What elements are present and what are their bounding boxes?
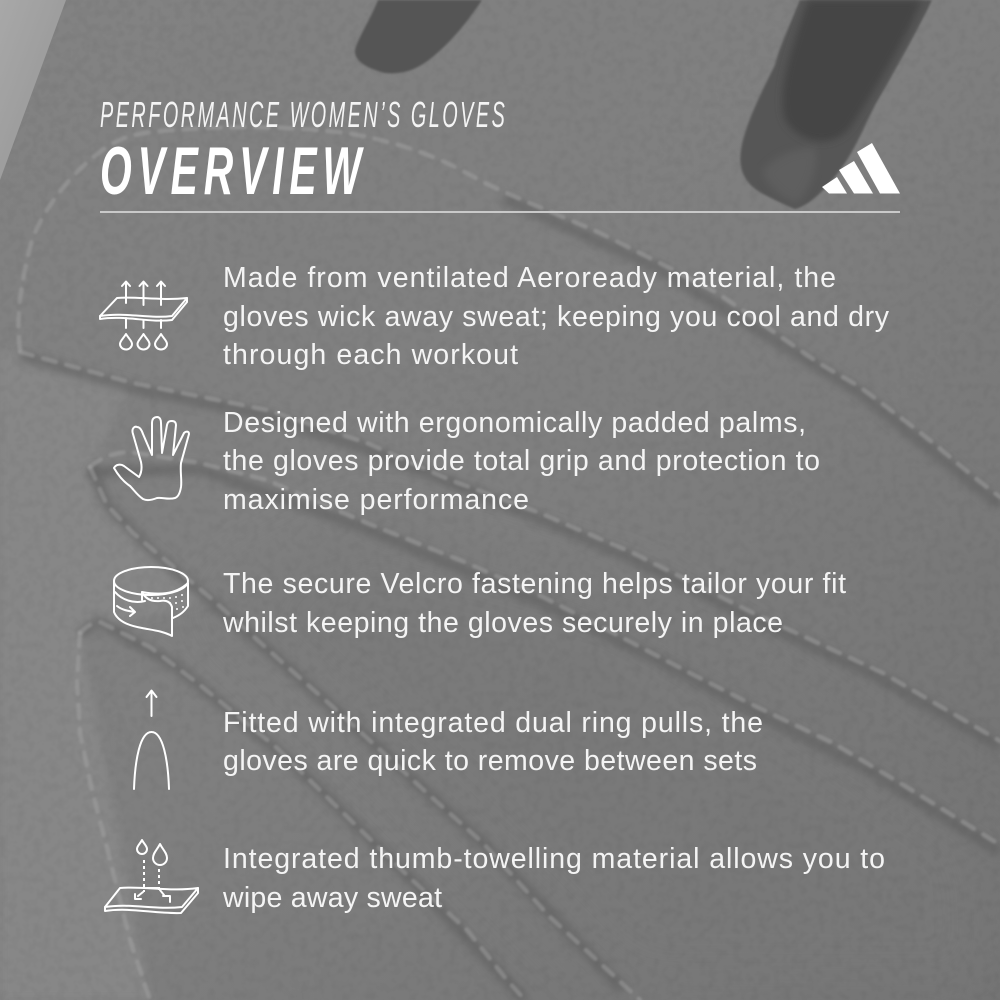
panel: light left band	[0, 350, 213, 1000]
feature: padded palms	[114, 407, 820, 516]
icon: hand	[114, 417, 189, 500]
feature: velcro fastening	[114, 567, 846, 639]
header	[100, 96, 900, 213]
icon: ring pull	[134, 690, 169, 789]
text: padded palms: the gloves provide total grip and protection to	[223, 445, 820, 477]
panel: light table corner	[0, 0, 66, 180]
text: ring pulls: gloves are quick to remove between sets	[223, 745, 757, 777]
title: OVERVIEW	[100, 132, 364, 209]
text: padded palms: Designed with ergonomically padded palms,	[223, 407, 806, 439]
text: velcro fastening	[222, 568, 846, 639]
seams: dark creases	[20, 198, 1000, 1000]
text: ring pulls	[223, 707, 763, 777]
text: ventilated material: gloves wick away sweat; keeping you cool and dry	[223, 301, 890, 333]
dark finger gap right	[740, 0, 932, 209]
text: padded palms: maximise performance	[223, 484, 529, 516]
dark finger gap left	[355, 0, 482, 73]
header rule	[100, 211, 900, 213]
text: padded palms	[223, 407, 820, 516]
text: ventilated material	[223, 262, 890, 371]
adidas logo	[822, 143, 900, 194]
panel: darker central band	[213, 523, 1000, 1000]
icon: wicking fabric	[100, 282, 187, 350]
text: thumb towelling	[222, 843, 885, 914]
icon: velcro strap	[114, 567, 188, 636]
icon: absorbent towel	[105, 840, 198, 913]
text: ventilated material: Made from ventilated Aeroready material, the	[223, 262, 836, 294]
text: ventilated material: through each workout	[223, 339, 518, 371]
feature: thumb towelling	[105, 840, 885, 914]
text: velcro fastening: The secure Velcro fastening helps tailor your fit	[223, 568, 846, 600]
feature: ring pulls	[134, 690, 763, 789]
text: velcro fastening: whilst keeping the gloves securely in place	[222, 607, 783, 639]
text: thumb towelling: wipe away sweat	[222, 882, 442, 914]
subtitle: PERFORMANCE WOMEN’S GLOVES	[100, 96, 505, 136]
text: thumb towelling: Integrated thumb-towelling material allows you to	[223, 843, 885, 875]
text: ring pulls: Fitted with integrated dual ring pulls, the	[223, 707, 763, 739]
feature: ventilated material	[100, 262, 890, 371]
